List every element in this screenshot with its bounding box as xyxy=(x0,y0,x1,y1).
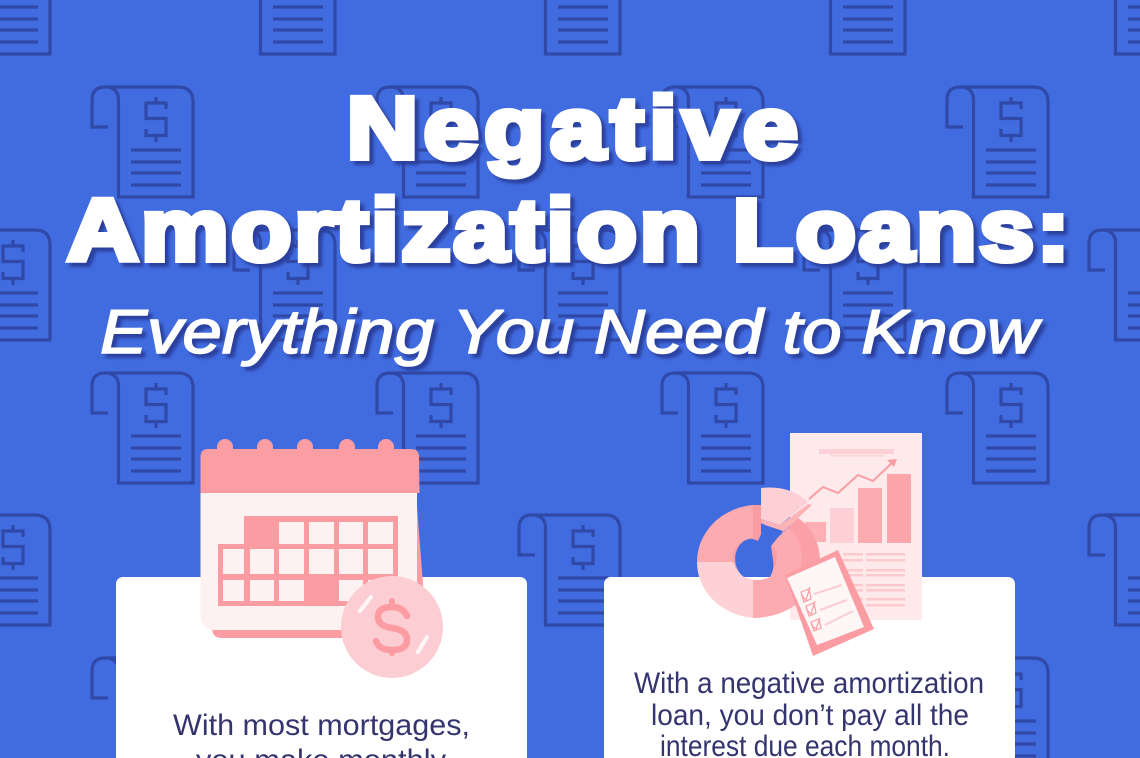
icon: dollar coin xyxy=(341,576,443,678)
text block: right card: loan, you don’t pay all the xyxy=(651,699,969,732)
bar chart xyxy=(805,474,911,543)
title: Everything You Need to Know xyxy=(100,298,1043,367)
icon: financial report with donut chart and clipboard xyxy=(697,433,922,656)
report sheet xyxy=(790,433,922,620)
donut hole xyxy=(735,525,783,577)
title xyxy=(67,79,1070,367)
panel: right card xyxy=(604,577,1015,758)
trend arrow xyxy=(809,459,897,499)
text block: right card: With a negative amortization xyxy=(634,667,984,700)
text block: right card xyxy=(634,667,984,758)
donut chart xyxy=(697,488,820,618)
icon: calendar with dollar coin xyxy=(200,439,443,678)
title: Negative xyxy=(347,79,798,177)
text block: left card: With most mortgages, xyxy=(173,709,470,742)
title: Amortization Loans: xyxy=(67,181,1070,279)
text block: left card xyxy=(173,709,470,758)
clipboard with checklist xyxy=(785,550,874,656)
panel: left card xyxy=(116,577,527,758)
pulled-out pie slice xyxy=(761,488,812,533)
